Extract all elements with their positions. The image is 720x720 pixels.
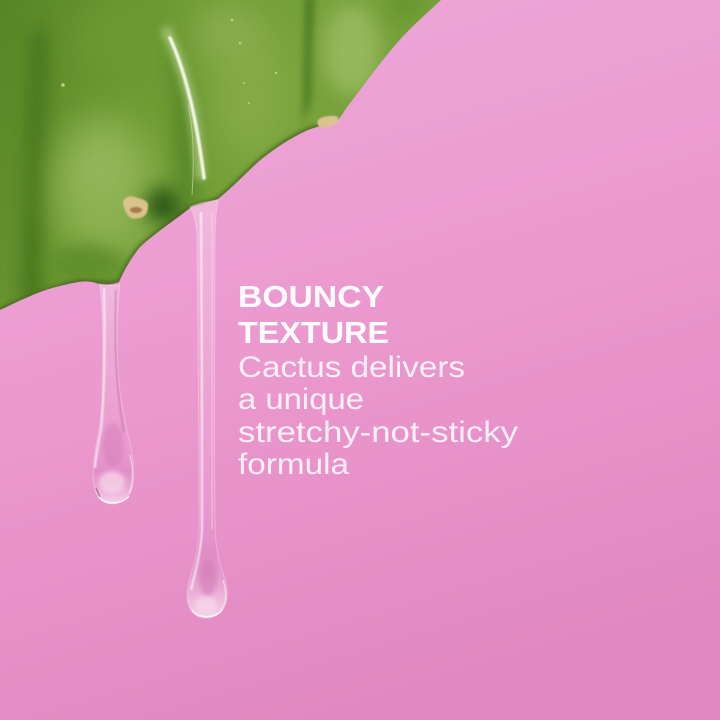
small specks bbox=[61, 19, 277, 104]
icon: cactus areole right bbox=[317, 116, 339, 128]
heading: TEXTURE bbox=[238, 316, 389, 350]
leaf shading bbox=[20, 0, 425, 305]
icon: cactus areole left bbox=[123, 196, 148, 219]
leaf edge shadow bbox=[0, 122, 336, 310]
short gel drop bbox=[93, 284, 134, 504]
body copy: a unique bbox=[238, 383, 364, 416]
cactus leaf bbox=[0, 0, 445, 315]
drop highlights bbox=[191, 212, 226, 617]
body copy: formula bbox=[238, 448, 349, 481]
heading bbox=[238, 280, 389, 350]
drop highlights bbox=[95, 288, 133, 503]
body copy: Cactus delivers bbox=[238, 351, 465, 384]
body copy: stretchy-not-sticky bbox=[238, 416, 518, 449]
heading: BOUNCY bbox=[238, 280, 384, 314]
text block: bouncy texture bbox=[238, 280, 518, 481]
long gel drop bbox=[187, 200, 227, 618]
gel streak on leaf bbox=[165, 28, 204, 195]
body copy bbox=[238, 351, 518, 481]
